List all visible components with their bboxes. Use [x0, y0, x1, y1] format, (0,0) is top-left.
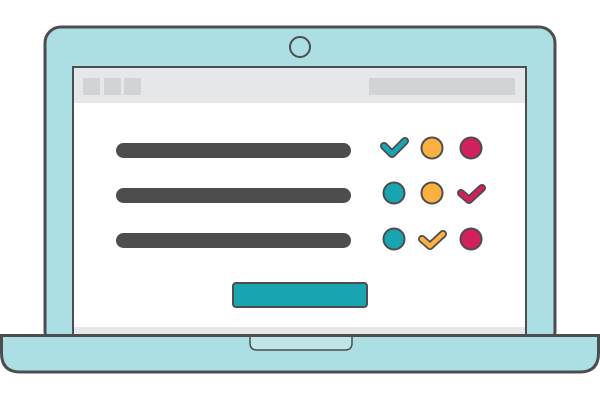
camera	[290, 37, 310, 57]
laptop base	[2, 336, 598, 372]
status icons	[384, 138, 482, 250]
laptop lid	[45, 27, 555, 347]
button	[233, 283, 367, 307]
text lines	[116, 143, 351, 248]
browser bar	[74, 68, 525, 103]
trackpad notch	[250, 337, 352, 350]
screen	[73, 67, 526, 337]
